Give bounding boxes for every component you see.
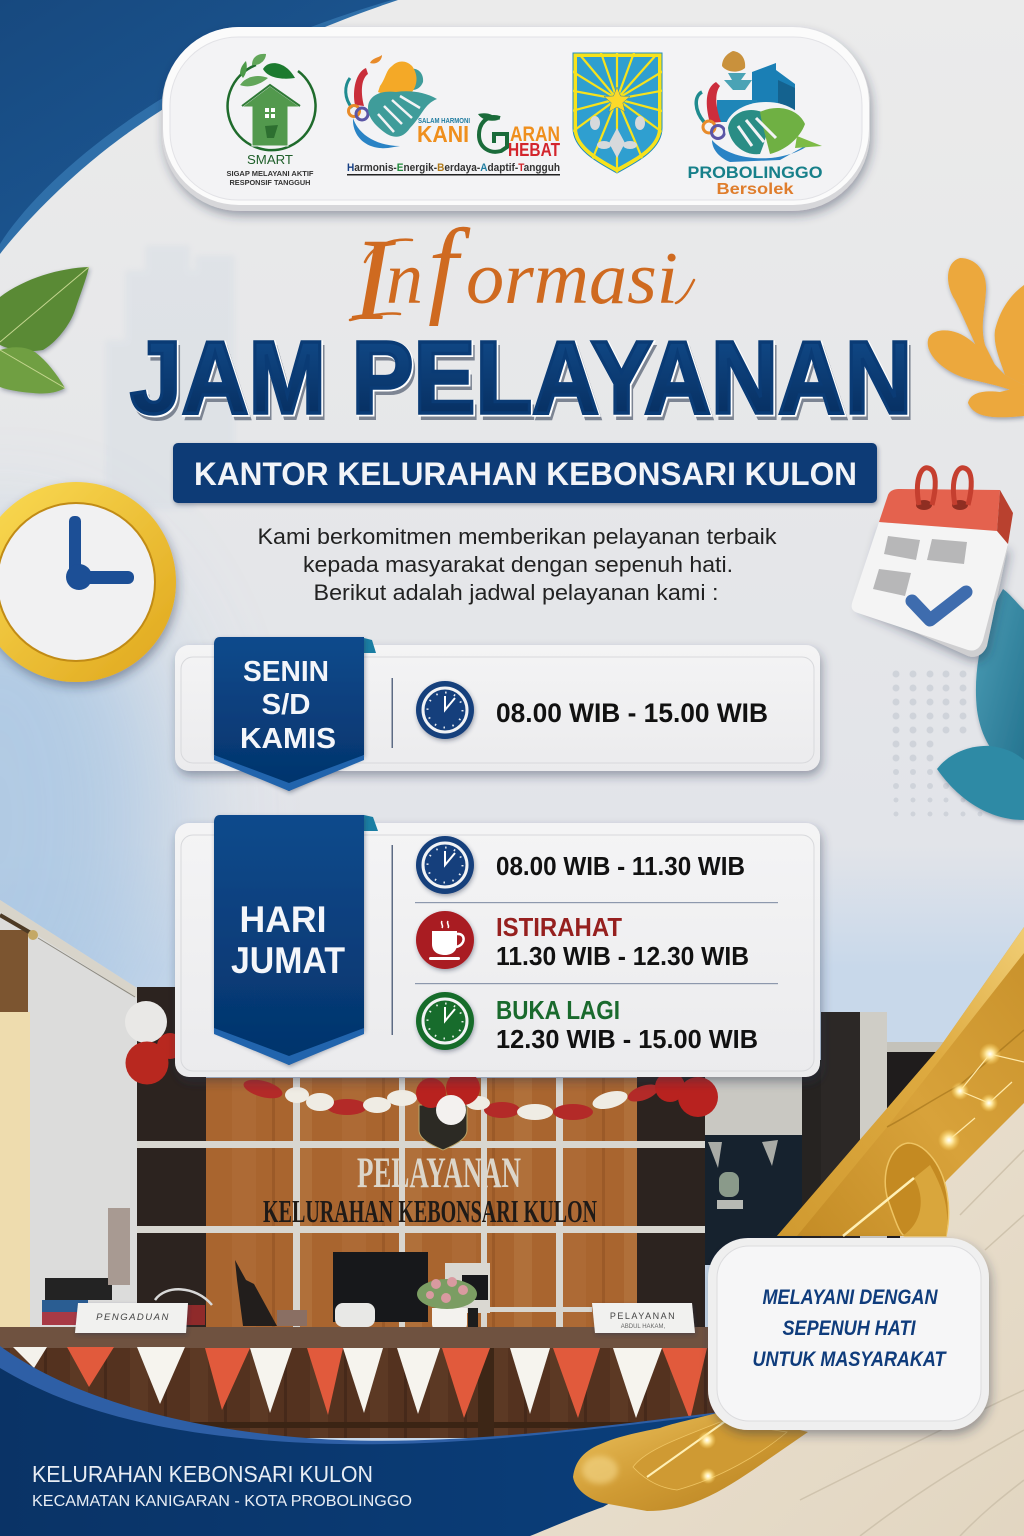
logo panel	[162, 27, 870, 211]
intro text: kepada masyarakat dengan sepenuh hati.	[303, 552, 733, 577]
slogan card: UNTUK MASYARAKAT	[752, 1348, 947, 1371]
office photo	[0, 900, 962, 1438]
ribbon: Hari Jumat	[214, 815, 378, 1065]
logo: Salam Harmoni Kanigaran Hebat: ARAN	[510, 123, 560, 146]
title script: Informasi	[350, 208, 694, 345]
logo: SMART: SIGAP MELAYANI AKTIF	[226, 169, 314, 178]
cream corner background	[530, 1095, 1024, 1536]
icon: green leaves left	[0, 267, 89, 393]
title script: Informasi: n	[386, 238, 423, 320]
photo: name plates	[75, 1303, 695, 1333]
panel: Hari Jumat: 08.00 WIB - 11.30 WIB	[496, 851, 745, 881]
label: Istirahat: ISTIRAHAT	[496, 912, 622, 942]
footer text: KELURAHAN KEBONSARI KULON	[32, 1461, 373, 1487]
logo: SMART: SMART	[247, 153, 293, 167]
title: JAM PELAYANAN: JAM PELAYANAN	[133, 325, 915, 440]
logo: Salam Harmoni Kanigaran Hebat: KANI	[417, 121, 469, 147]
icon: clock navy	[416, 681, 474, 739]
ribbon: Senin s/d Kamis: KAMIS	[240, 723, 336, 755]
logo: Salam Harmoni Kanigaran Hebat: HEBAT	[508, 140, 560, 160]
logo: Salam Harmoni Kanigaran Hebat: SALAM HARMONI	[418, 116, 470, 125]
footer text: KECAMATAN KANIGARAN - KOTA PROBOLINGGO	[32, 1493, 412, 1510]
photo: monitor and desk items	[42, 1208, 490, 1350]
dot pattern	[892, 670, 983, 816]
logo: Probolinggo Bersolek: Bersolek	[716, 181, 794, 198]
photo: wood wall panel	[206, 1078, 637, 1328]
ribbon: Hari Jumat: HARI	[240, 899, 326, 940]
ribbon: Senin s/d Kamis	[214, 637, 376, 791]
label: Buka Lagi: BUKA LAGI	[496, 995, 620, 1025]
photo: counter desk	[0, 1327, 720, 1438]
slogan card	[708, 1238, 989, 1430]
photo: dark pillars	[137, 987, 705, 1335]
subtitle banner	[173, 443, 877, 503]
photo: balloons	[125, 1001, 718, 1125]
bottom navy wave	[0, 1346, 720, 1536]
panel: Hari Jumat: 11.30 WIB - 12.30 WIB	[496, 941, 749, 971]
photo: wall sign text: PELAYANAN	[357, 1150, 521, 1197]
intro text: Berikut adalah jadwal pelayanan kami :	[314, 580, 718, 605]
photo: name plates: ABDUL HAKAM,	[621, 1324, 666, 1330]
panel: Senin s/d Kamis	[175, 637, 820, 791]
photo: wall sign text	[263, 1150, 597, 1229]
logo: SMART: RESPONSIF TANGGUH	[230, 178, 310, 187]
gold ribbon	[777, 927, 1024, 1236]
ribbon: Senin s/d Kamis: S/D	[262, 689, 310, 721]
icon: teal leaves right	[937, 589, 1024, 820]
slogan card: SEPENUH HATI	[782, 1317, 916, 1340]
logo: Salam Harmoni Kanigaran Hebat	[346, 55, 560, 176]
icon: orange leaves right	[928, 258, 1024, 417]
photo: bunting flags	[13, 1347, 707, 1420]
panel: Hari Jumat: 12.30 WIB - 15.00 WIB	[496, 1024, 758, 1054]
title script: Informasi: ormasi	[466, 238, 678, 320]
photo: white grid lines	[137, 1078, 705, 1328]
title script: Informasi: f	[428, 208, 471, 327]
icon: clock green	[416, 992, 474, 1050]
subtitle banner: KANTOR KELURAHAN KEBONSARI KULON	[194, 456, 857, 492]
logo: SMART	[226, 54, 316, 187]
icon: calendar	[852, 468, 1013, 657]
panel: Hari Jumat	[175, 815, 820, 1077]
top-left navy swoosh	[0, 0, 398, 254]
intro text: Kami berkomitmen memberikan pelayanan terbaik	[258, 524, 778, 549]
footer text	[32, 1461, 412, 1510]
photo: right wall and door	[704, 1012, 962, 1272]
photo: name plates: PENGADUAN	[96, 1312, 170, 1323]
icon: coffee cup	[416, 911, 474, 969]
photo: wall sign text: KELURAHAN KEBONSARI KULON	[263, 1193, 597, 1229]
slogan card: MELAYANI DENGAN	[762, 1286, 938, 1309]
logo: Probolinggo Bersolek: PROBOLINGGO	[688, 163, 822, 182]
ribbon: Senin s/d Kamis: SENIN	[243, 656, 329, 688]
title: JAM PELAYANAN: JAM PELAYANAN	[131, 321, 913, 436]
panel: Senin s/d Kamis: 08.00 WIB - 15.00 WIB	[496, 698, 768, 728]
photo: emblem and garland	[242, 1076, 660, 1150]
logo: city coat of arms shield	[572, 52, 662, 174]
gold drop swirl	[573, 1413, 808, 1511]
photo: name plates: PELAYANAN	[610, 1311, 676, 1321]
title: JAM PELAYANAN: JAM PELAYANAN	[130, 320, 912, 435]
intro text	[258, 524, 778, 605]
photo: left wall and curtain	[0, 900, 137, 1340]
ribbon: Hari Jumat: JUMAT	[231, 940, 345, 981]
logo: Probolinggo Bersolek	[688, 51, 822, 198]
title script: Informasi: I	[351, 214, 396, 345]
logo: Salam Harmoni Kanigaran Hebat: Harmonis-Energik-Berdaya-Adaptif-Tangguh	[347, 162, 560, 174]
icon: clock navy	[416, 836, 474, 894]
icon: wall clock	[0, 482, 176, 682]
